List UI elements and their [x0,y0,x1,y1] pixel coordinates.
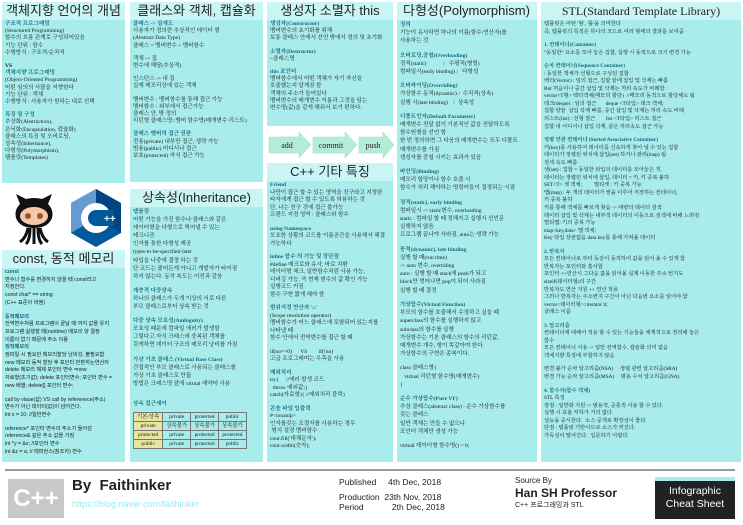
text block: 지정한다. [5,284,26,290]
text block: 프로그램 끝나야 사라짐, auto는 생략 가능 동적(dynamic), late binding [400,232,499,253]
text block: 템플릿(Templates) [5,155,48,161]
heading: 상속성(Inheritance) [142,190,251,205]
heading [267,2,393,20]
text block: 키 중복 불허 [544,197,572,203]
text block: 장점 : 일반화 지원 -> 범용적, 공통적 사용 할 수 있다. [544,403,663,409]
text block [400,20,518,449]
text block: block만 벗어나면 pop이 되어 사라짐 [400,279,486,285]
text block: 정적(static) / 수평적(병렬) [400,61,480,67]
text block: 나타낼 때 [270,328,293,334]
divider line [5,469,735,471]
text block: 객체지향 프로그래밍 [5,70,55,76]
text block: 간접적인 부모 클래스로 사용되는 클래스를 [133,365,236,371]
text block: Key 타입 상관없음 data key를 통해 가져올 데이터 2. 반복자 [544,235,655,255]
text block: 전역변수처럼 프로그램이 끝날 때 까지 값을 유지 [5,321,109,327]
panel: STL(Standard Template Library) [541,2,741,462]
text block: 실제 메모리상에 있는 객체 멤버변수 : 멤버함수를 통해 접근 가능 [133,83,223,103]
text block: 객체의 주소가 들어있다 [270,91,327,97]
text block: 반복자도 연산 지원 ++ 연산 적용 [544,286,618,292]
text block: vector<데이터형>::iterator it; [544,302,608,308]
text block: STL 특징 [544,395,565,401]
text block: delete 메모리 해제 포인터 변수 =new [5,367,87,373]
text block: 실행 할 때(run time) [400,255,447,261]
panel: 클래스와 객체, 캡슐화 [130,2,263,182]
table: 상속 접근제어: 상속불가 [194,423,215,429]
text block: 컴파일시(early binding) / 다형성 오버라이딩(Overriding) [400,69,478,89]
text block: 모든 컨테이너로 부터 독같이 동작하여 값을 읽어 올 수 있게 함 [544,256,685,262]
panel: const, 동적 메모리 [2,250,125,462]
text block: 보호(protected) 자식 접근 가능 [133,153,205,159]
text block: 가상함수 동적(dynamic) / 수직적(상속) [400,91,493,97]
text block: 함수가 처리 해야하는 명령어들이 결정되는 시점 정적(static), early binding [400,185,515,206]
text block: -> auto 변수, overriding [400,263,454,269]
text block: 데이터가 정렬된 위치에 삽입(set) 하거나 관리(map) 됨 [544,152,666,158]
text block: 함수원형을 선언 함 [400,130,446,136]
text block: 키(key)를 사용하여 데이터를 신속하게 찾아 낼 수 있는 집합 [544,145,678,151]
table: 상속 접근제어: private [169,414,184,420]
text block: 데이터는 정렬된 위치에 삽입, 데이터 = 키, 키 중복 불허 [544,175,669,181]
text block: 포인터 객체만 생성 가능 virtual 데이터형 함수명() = 0; [400,429,469,449]
text block: 셋(set) : 집합 = 동일한 타입의 데이터를 모아놓은 것, [544,167,662,173]
text block: 즉, 템플릿의 특징은 하나의 코드로 여러 형태의 결과를 보여줌 1. 컨테이너(Container) [544,29,684,48]
text block: 벡터(Vector) : 임의 접근, 집합 끝에 삽입 및 삭제는 빠름 [544,78,668,84]
text block: 어떤 임의의 사물을 지향한다 [5,85,74,91]
text block: 갖는 클래스 [400,412,428,418]
text block: 클래스 -> 설계도 [133,21,173,27]
text block: virtual 리턴형 함수명(매개변수) [404,374,479,380]
text block: But 처음이나 중간 삽입 및 삭제는 처리 속도가 비례함 [544,86,665,92]
text block: 매개변수를 가짐 [400,147,439,153]
text block: 집합 양끝 삽입 삭제 빠름, 중간 삽입 및 삭제는 처리 속도 비례 [544,108,684,114]
text block: 형식 설정 멤버함수 [271,428,317,434]
text block: 컴파일시 -> static변수, overloading [400,208,482,214]
text block: 추상 클래스(abstract class) : 순수 가상함수를 [400,404,505,410]
table: 상속 접근제어: public [141,441,155,447]
footer: author [72,477,199,509]
text block: 생성자(Constructor) [270,21,319,27]
text block: 사용하는 것 오버로딩,중첩(Overloading) [400,38,467,59]
text block: 호출했는지 알게끔 함 [270,83,321,89]
text block: 템플릿 [133,209,149,215]
text block: 가상함수는 기본 클래스의 함수의 리턴값, [400,335,499,341]
text block: catch(자료형){ //예외처리 블럭} 콘솔 파일 입출력 [270,392,345,412]
heading [2,250,125,268]
text block: 프로그램 실행할 때(runtime) 메모리 양 결정 [5,329,100,335]
text block [544,20,700,439]
text block: 가독성이 떨어진다. 입문하기 어렵다. [544,433,629,439]
text block: "동일한" 요소를 모아 놓은 집합, 실행 시 동적으로 크기 변경 가능 순차 컨테이너(Sequence Container) [544,50,691,69]
text block: 가능하다 inline 함수 의 기능 및 장단점 [270,240,339,260]
text block: 다형성(Polymorphism), [5,148,59,154]
arrows: add commit push: add [281,141,293,150]
icon: github octocat [16,194,52,245]
heading: 클래스와 객체, 캡슐화 [137,3,256,18]
text block: int *y = &x; //포인터 변수 [5,441,60,447]
text block: 어떤 기능을 가진 함수나 클래스와 같은 [133,217,226,223]
heading [541,2,741,20]
text block: 단, 나는 친구 것에 접근 불가능 [270,204,343,210]
text block: 반복자는 포인터와 흡사함 [544,264,603,270]
text block: 나만이 접근 할 수 있는 영역을 친구라고 지정한 [270,190,382,196]
text block: 리턴형 클래스명::멤버 함수명(매개변수 리스트) 클래스 멤버의 접근 권한 [133,118,247,137]
table: 상속 접근제어: public [226,414,239,420]
text block: 모호한 상황의 코드를 이름공간을 사용해서 해결 [270,233,385,239]
table: 상속 접근제어: protected [195,441,215,447]
text block: 기능 단위 : 객체 [5,92,43,98]
text block: 변수나 함수를 변경하지 않을 때 const라고 [5,277,96,283]
text block: 그렇다고 자식 크래스에 중복된 객체를 [133,334,225,340]
text block: } 순수 가상함수(Pure VF) [400,382,458,402]
text block: try{ //에러 발생 코드 [270,377,324,383]
text block: 템플릿은 어떤 '형', '틀'을 의미한다 [544,21,621,27]
text block: 데크(deque) : 임의 접근 deque <T타입> 데크 객체; [544,101,664,107]
table: 상속 접근제어: 상속불가 [222,423,243,429]
text block: 인자를 통한 다형성 제공 [133,241,191,247]
table: 상속 접근제어: private [169,441,184,447]
footer: infographic badge: Cheat Sheet [666,498,724,510]
text block: 클래스 이름 3. 알고리즘 [544,309,571,329]
table: 상속 접근제어: protected [195,432,215,438]
text block: 가상 기초 클래스로 만듦 [133,373,191,379]
panel: 다형성(Polymorphism) [397,2,537,462]
text block: 자료형(초기값); delete 포인터변수; 포인터 변수 = [5,375,112,381]
footer: dates: Published 4th Dec, 2018 [339,477,441,487]
text block: sizeif(데이터형)의 구간 [544,279,596,285]
table: 상속 접근제어: 상속불가 [166,423,187,429]
text block: 컴파일 시 필요한 메모리할당 낭비성, 불필요함 [5,352,104,358]
text block [5,20,95,161]
footer: infographic badge: Infographic [669,485,721,497]
text block: 변수가 아닌 데이터(값)이 넘어간다. [5,404,81,410]
text block: SET<T> 셋 객체; 멀티셋 : 키 중복 가능 [544,182,642,188]
arrows: add commit push [268,132,394,158]
footer: dates: Production 23th Nov, 2018 [339,492,441,502]
text block: map<key,data> 맵 객체; [544,228,596,234]
text block [270,20,382,111]
text block: 변수에 해당(추상적) 인스턴스 -> 내 집 [133,63,181,82]
text block: reference& 같은 주소 값을 가짐 [5,433,74,439]
text block: 집합 내 어디서나 삽입 삭제, 같은 처리속도 접근 가능 정렬 연관 컨테이너 (Sorted Associative Container) [544,124,663,143]
text block: 단점 : 템플릿 기반이므로 소스가 커진다. [544,425,635,431]
text block: 단 코드는 줄어든게 아니고 개발자가 타이핑 [133,266,237,272]
text block [133,208,247,449]
table: 상속 접근제어: protected [222,432,242,438]
text block: static : 컴파일 할 때 정해지고 실행시 선언문 [400,216,504,222]
text block: 범용(public) 어디서나 접근 [133,146,197,152]
table: 상속 접근제어: protected [195,414,215,420]
text block: 메모리 할당이나 함수 호출 시 [400,177,470,183]
text block: 타입을 나중에 결정 하는 것 [133,258,198,264]
text block: auto : 실행 할 때 stack에 push가 되고 [400,271,486,277]
text block: 고급 프로그래머는 우측을 사용 예외처리 [270,356,344,376]
text block: 함수 안에서 전역변수를 접근 할 때 if(no==0) VS if(!no) [270,335,353,354]
panel: 객체지향 언어의 개념 [2,2,125,183]
footer: infographic badge [655,477,735,519]
text block: 실행 시(late binding) / 상속성 디폴트인자(Default Parameter) [400,100,475,120]
text block: types-to-be-specified-later [133,249,192,255]
text block: 갖게하면 데이터 구조의 메모리 낭비를 가짐 가상 기초 클래스 (Virtual Base Class) [133,342,237,362]
text block: 객체지향 특징에 부합하지 않음 변경 불가 순차 알고리즘(NSA) 정렬 관련 알고리즘(SRA) [544,353,677,372]
text block: 인자를갖는 조절자를 사용하는 경우 [270,420,355,426]
text block: superclass의 함수를 실행하지 않고 [400,318,481,324]
text block: throw 예외값;} [273,384,308,390]
text block: 성능을 중시한다. 소스 공개로 확장성이 좋다. [544,418,647,424]
text block: 테크니즘 [133,233,155,239]
footer: dates: Period 2th Dec, 2018 [339,502,445,512]
text block: 함수 [544,338,554,344]
table: 상속 접근제어: public [226,441,239,447]
footer: author: By Faithinker [72,477,171,494]
text block: 은닉화(Encapsulation, 캡슐화) [5,127,76,133]
text block: #define 매크로와 유사, 바로 치환 [270,262,348,268]
text block: Friend [270,182,286,188]
text block: 클래스 안, 밖 정의 [133,111,176,117]
text block: 매개변수 전달 없이 기본적인 값을 전달하도록 [400,122,510,128]
text block: 하지 않는다. 동작 속도는 이전과 같음 계층적 다중상속 [133,274,222,294]
heading: 다형성(Polymorphism) [403,3,530,18]
text block: 수행방식 : 구조적/순차적 VS [5,50,65,69]
table: 상속 접근제어 [133,412,247,449]
footer: source: C++ 프로그래밍과 STL [515,502,584,509]
text block: 모든 컨테이너 사용 -> 일반 전역함수, 캡슐화 의미 없음 [544,345,668,351]
text block: 검색 속도 빠름 [544,160,577,166]
text block: 일반 객체는 만들 수 없으나 [400,421,465,427]
text block: 컨테이너에 대해서 적용 할 수 있는 기능들을 체계적으로 정리해 놓은 [544,330,699,336]
footer: dates [339,477,445,512]
text block: 실행하지 않음 [400,224,434,230]
heading [130,189,263,207]
text block: 프렌드 지정 영역 : 클래스와 함수 using Namespace [270,212,349,232]
text block: 하나의 클래스가 두개 이상의 서로 다른 [133,296,226,302]
text block: #<ionanip> [270,413,296,419]
footer: author: https://blog.naver.com/faithinker [72,499,199,509]
text block [133,20,247,159]
heading: STL(Standard Template Library) [562,4,720,18]
text block: new 메모리 동적 할당 후 포인터 반환하는연산자 [5,360,109,366]
text block: 데이터형을 다형으로 찍어낼 수 있는 [133,225,220,231]
text block: : 동일한 객체가 선형으로 구성된 집합 [544,71,629,77]
text block: 리스트(list) : 선형 접근 list <T타입> 리스트 접근 [544,116,661,122]
text block: 멀티맵: 키의 중복 가능 [544,220,596,226]
text block: 가상함수의 구현은 종복이다. class 클래스명{ [400,351,469,371]
text block: 클래스 = 멤버변수 + 멤버함수 객체 -> 집 [133,43,204,62]
text block: 변수명(값)을 같게 해줘서 보기 편하다. [270,105,362,111]
text block: cout.fill('대체문자'); [270,436,316,442]
text block: 기능 단위 : 함수 [5,43,43,49]
text block: 실행 할 때 결정 가상함수(Virtual Function) [400,288,465,308]
panel: C++ 기타 특징 [267,163,393,462]
text block: 포인터 ++연산시 그다음 값을 읽어올 실제 이동한 주소 번지도 [544,271,683,277]
table: 상속 접근제어: 기본/상속 [137,414,159,420]
text block: 그러나 반복자는 주소번지 구간이 아닌 다음번 요소를 읽어야 함 [544,294,688,300]
icon: C++ logo: ++ [104,214,116,225]
text block: 추상화(Abstraction), [5,119,52,125]
text block [270,182,385,449]
text block: (Abstract Data Type) [133,35,180,41]
text block: 수행방식 : 사용자가 원하는 대로 선택 특징 및 구성 [5,99,95,118]
text block: 한 번 정의하면 그 다음의 매개변수는 모두 디폴트 [400,138,518,144]
text block: 부모 클래스로부터 상속 받는 것 다중 상속 모호성(Ambiguity) [133,304,209,324]
text block: 기능이 유사하면 하나의 이름(함수/연산자)를 [400,30,507,36]
arrows: add commit push: commit [319,141,344,150]
text block: cout.width(숫자); [270,443,310,449]
footer: C++ badge [8,479,64,518]
text block: 데이터형 체크, 일반함수처럼 사용 가능, [270,269,365,275]
arrows: add commit push: push [365,141,381,150]
text block: 맵(map) : 두 개의 데이터가 쌍을 이루어 저장하는 컨테이너, [544,190,678,196]
text block: const char* == string [5,292,53,298]
text block: 부모의 함수를 호출해서 수정하고 싶을 때 [400,310,499,316]
text block: 변경 가능 순차 알고리즘(MSA) 범용 수치 알고리즘(GNA) 4. 함수자(함수 객체) [544,374,679,394]
text block: (Object-Oriented Programming) [5,77,77,83]
heading: 생성자 소멸자 this [280,3,380,18]
heading: const, 동적 메모리 [13,251,114,266]
text block: subclass의 함수를 실행 [400,326,454,332]
panel: 상속성(Inheritance) [130,189,263,462]
footer: source: Han SH Professor [515,486,617,500]
text block: vector<T형> 벡터객체(메모리 할당) //메모리 동적으로 할당해도 됨 [544,93,695,99]
footer: source: Source By [515,476,552,485]
text block: 사용자가 정의한 추상적인 데이터 형 [133,28,220,34]
text block: (Structured Programming) [5,28,64,34]
text block: int x = 10; //일반변수 reference* 포인터 변수의 주소가 들어감 [5,412,92,432]
text block: 멤버변수의 매개변수 이름과 그것을 담는 [270,98,367,104]
text block: 클래스의 특징 및 오버로딩, [5,134,70,140]
table: 상속 접근제어: protected [138,432,158,438]
text block: 정적메모리 [5,344,29,350]
text block: 정의 [400,22,411,28]
text block: 멤버함수에서 어떤 객체가 자기 자신을 [270,76,362,82]
text block: 함수의 흐름 관계로 구성되어있음 [5,35,85,41]
text block: 구조적 프로그래밍 [5,21,50,27]
footer: source [515,476,617,509]
text block: 상속성(Inheritance), [5,141,52,147]
text block: 멤버변수의 초기화를 위해 [270,28,332,34]
text block: (Scope resolution operator) [270,312,331,318]
heading: 객체지향 언어의 개념 [6,3,121,18]
panel: 생성자 소멸자 this [267,2,393,126]
text block: 실행코드 커짐 [270,284,304,290]
text block: 이름이 없기 때문에 주소 이용 [5,337,68,343]
text block: 전용(private) 내부만 접근, 생략 가능 [133,139,219,145]
heading [267,163,393,181]
icon: C++ logo [71,189,121,247]
text block: int &z = a; // 레퍼런스(참조자) 변수 [5,449,82,455]
footer: C++ badge: C++ [13,485,59,512]
text block: 멤버함수가 어느 클래스에 포함되어 있는지를 [270,320,378,326]
table: 상속 접근제어: private [141,423,156,429]
text block: 방법은 크래스명 앞에 virtual 예약어 사용 상속 접근제어 [133,381,230,407]
text block: 함수 구현 짧게 해야 함 범위지정 연산자 '::' [270,292,324,311]
heading: C++ 기타 특징 [290,164,370,179]
text block: 타자에게 접근 할 수 있도록 허용하는 것 [270,197,365,203]
text block [5,269,112,455]
text block: 멤버함수 : 외부에서 접근가능 [133,104,204,110]
text block: 보통 클래스 안에서 선언 밖에서 정의 및 초기화 소멸자(Destructor) [270,35,382,55]
text block: 실행 시 효율 저하가 거의 없다. [544,410,613,416]
text block: 매개변수 개수, 형이 똑같아야 한다. [400,343,484,349]
text block: 디버깅 가능, 즉 현재 변수의 값 확인 가능 [270,276,368,282]
text block: new 배열; delete[] 포인터 변수; call by vlaue(값) VS call by referenece(주소) [5,383,106,403]
text block: const [5,269,19,275]
text block: 데이터 삽입 및 삭제는 내부적 데이터의 이동으로 검색에 비해 느려짐 [544,213,699,219]
text block: 모호성 때문에 컴파일 에러가 발생함 [133,326,220,332]
text block: 키를 통해 객체를 빠르게 찾음 -> 대량의 데이터 검색 [544,205,662,211]
text block: 생성자를 중첩 시키는 효과가 있음 바인딩(Binding) [400,155,481,175]
text block: (C++ 표준이 바뀜) 동적메모리 [5,300,45,320]
table: 상속 접근제어: private [169,432,184,438]
text block: ~클래스명 this 포인터 [270,56,296,75]
